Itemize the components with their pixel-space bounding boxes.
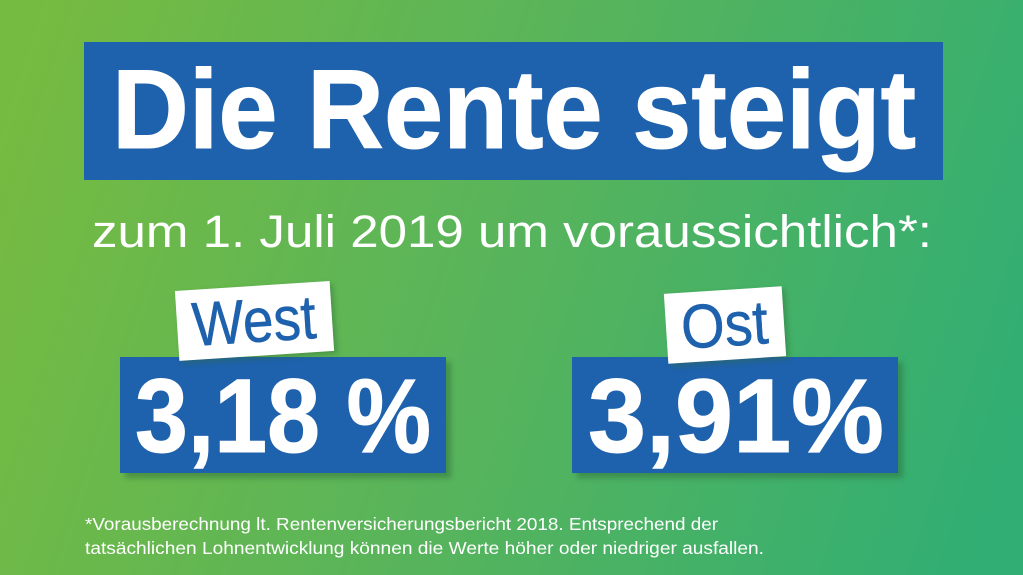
- title: Die Rente steigt: [112, 47, 916, 172]
- footnote: [85, 514, 764, 558]
- title banner: [84, 42, 943, 180]
- panel: Ost: [572, 286, 903, 478]
- footnote: tatsächlichen Lohnentwicklung können die Werte höher oder niedriger ausfallen.: [85, 538, 764, 558]
- label: Ost: Ost: [679, 288, 770, 363]
- panel: West: [120, 281, 451, 478]
- label: West: West: [190, 283, 318, 360]
- value: West: 3,18 %: [135, 358, 431, 475]
- value: Ost: 3,91%: [588, 358, 884, 475]
- value box: Ost: [572, 357, 898, 475]
- value box: West: [120, 357, 446, 475]
- footnote: *Vorausberechnung lt. Rentenversicherungsbericht 2018. Entsprechend der: [85, 514, 718, 534]
- subtitle: zum 1. Juli 2019 um voraussichtlich*:: [92, 206, 932, 257]
